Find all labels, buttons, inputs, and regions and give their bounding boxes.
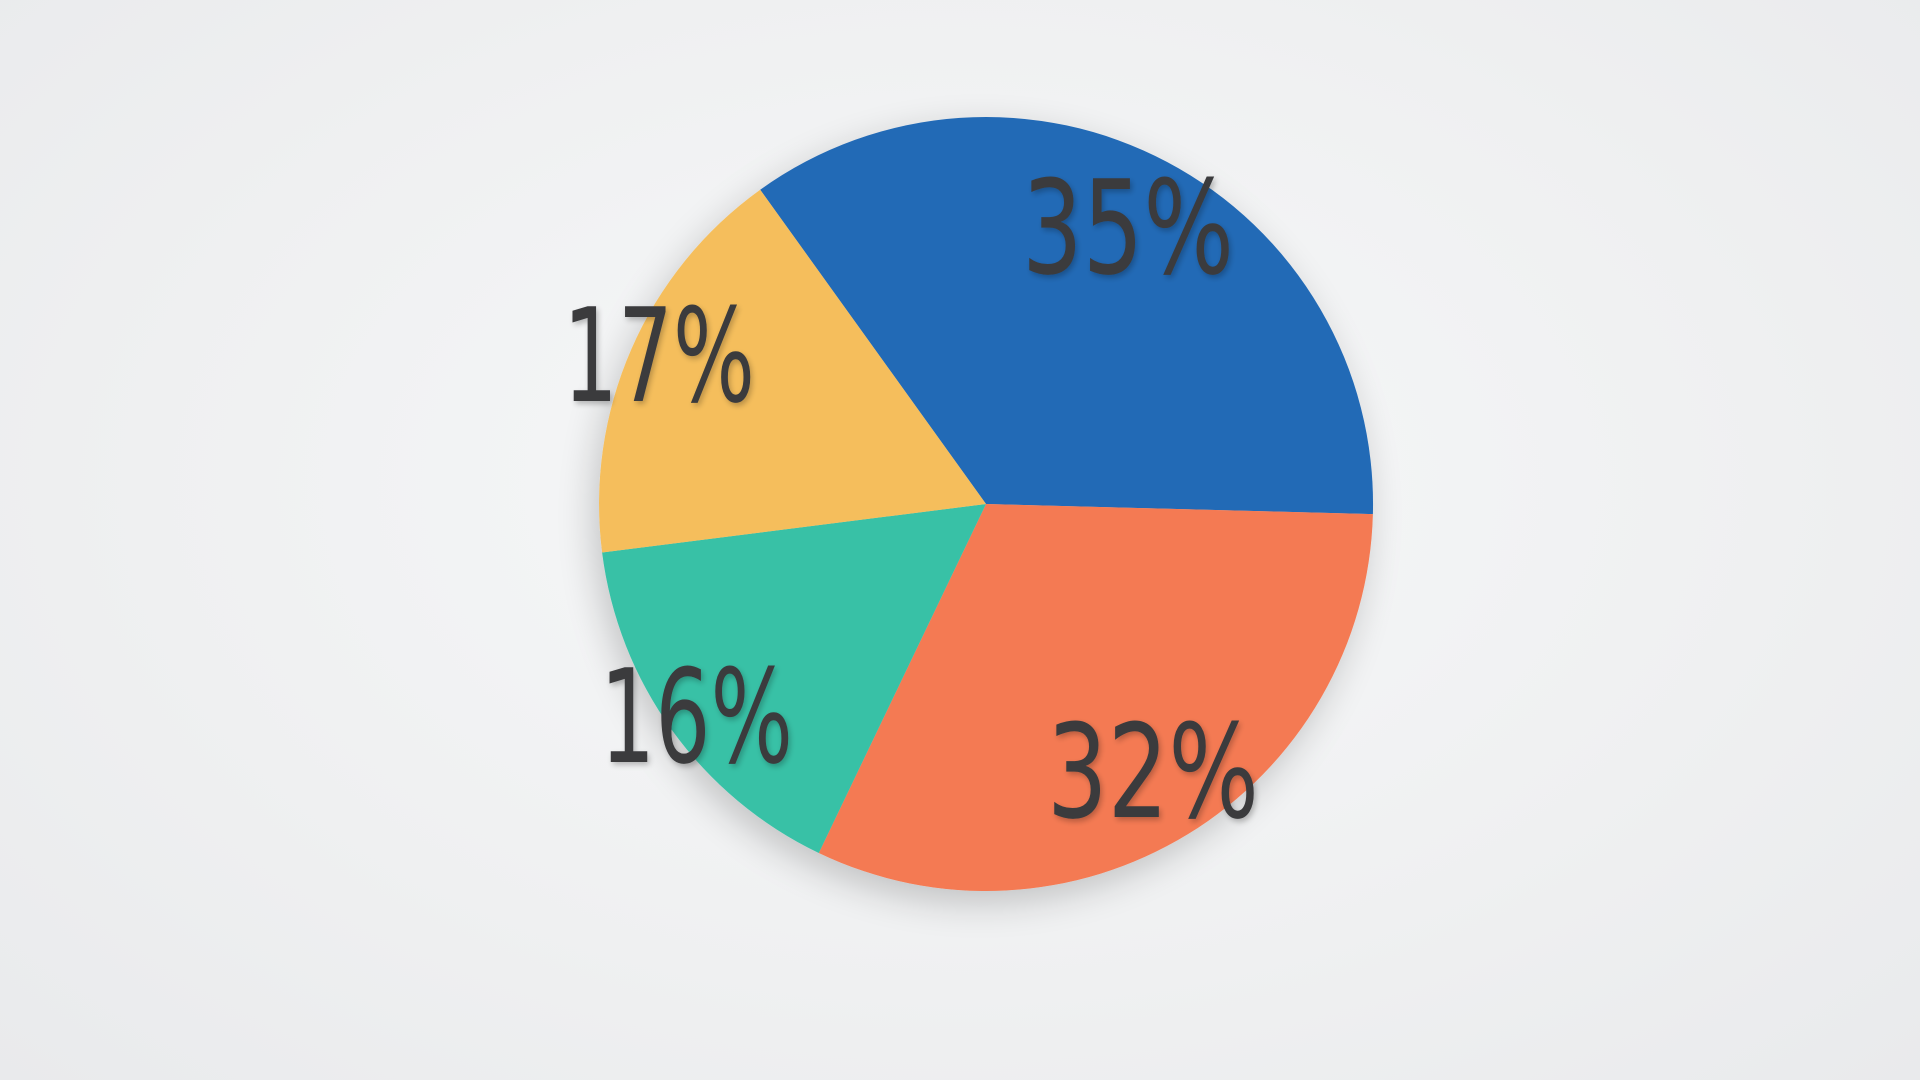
label: 16%: 16% xyxy=(600,641,793,793)
label: 17%: 17% xyxy=(563,280,755,432)
slice: teal 16% xyxy=(602,504,986,853)
label: 32%: 32% xyxy=(1047,696,1259,848)
slice: orange 32% xyxy=(819,504,1373,891)
slice: yellow 17% xyxy=(599,190,986,552)
label: 35%: 35% xyxy=(1022,152,1234,304)
slice: blue 35% xyxy=(760,117,1373,514)
